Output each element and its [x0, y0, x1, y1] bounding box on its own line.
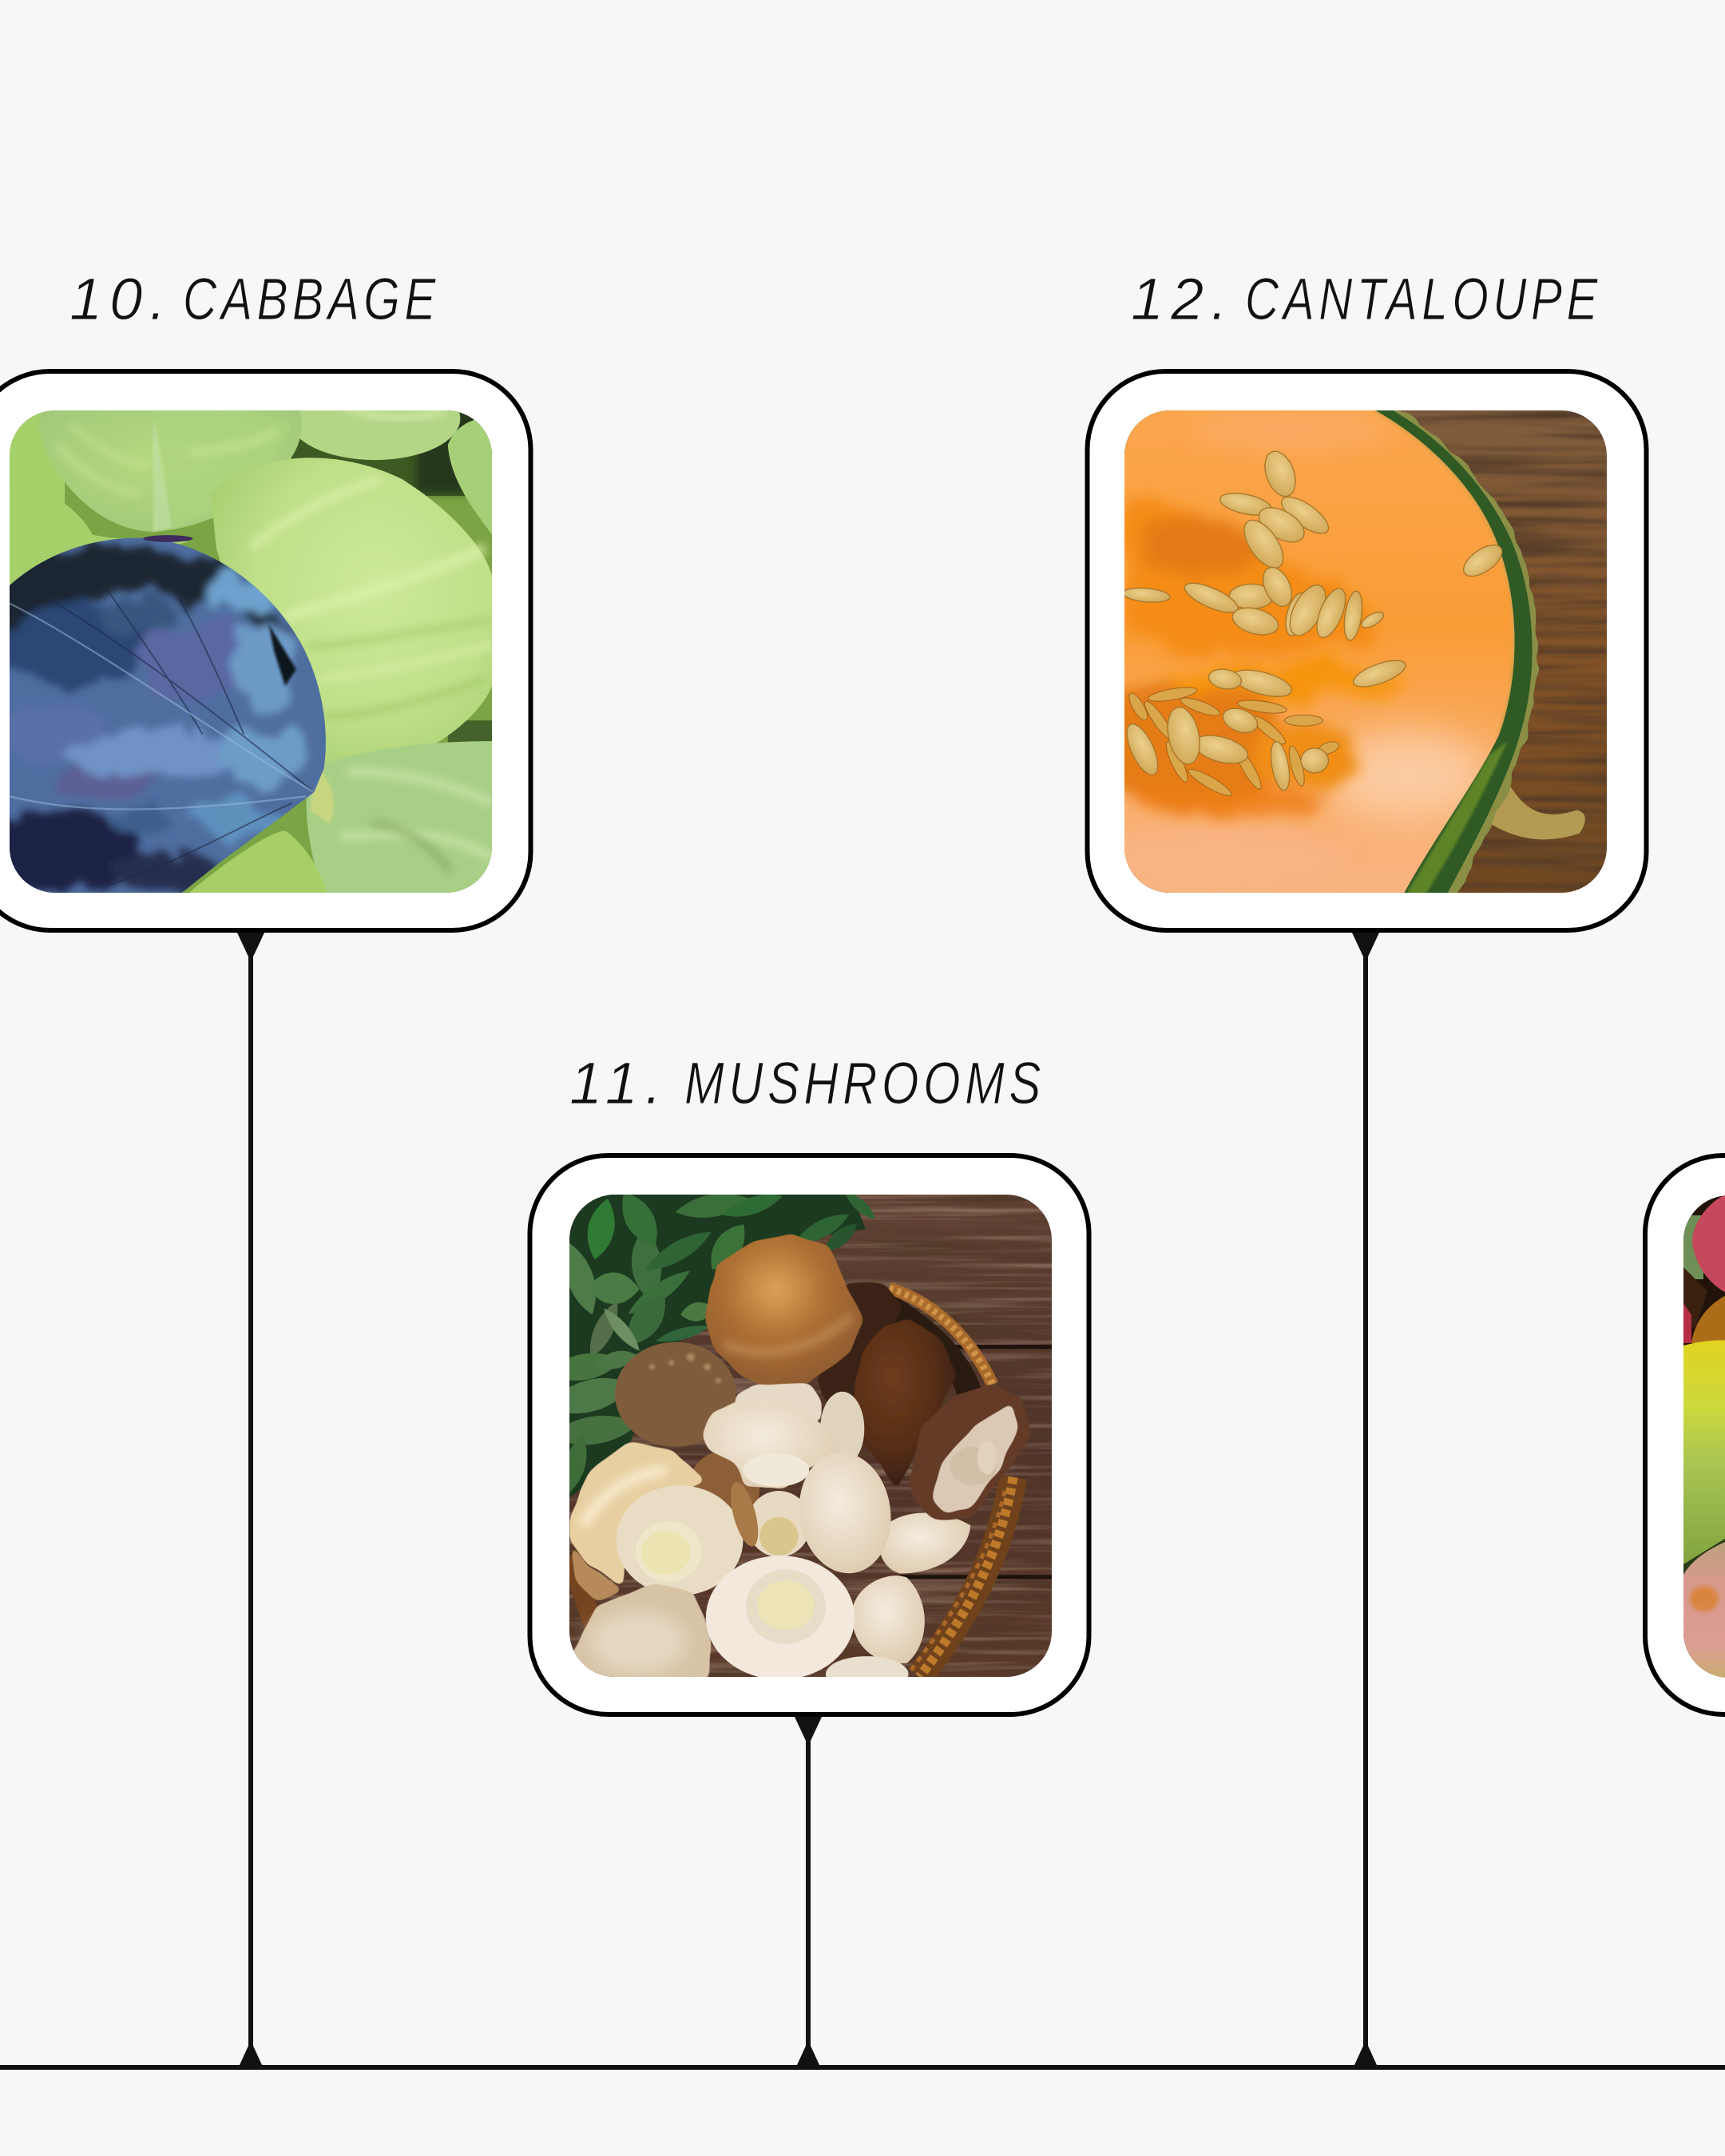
right white behind [820, 1392, 864, 1466]
card: cantaloupe [1077, 371, 1647, 930]
label: 10. Cabbage: CABBAGE [183, 266, 440, 332]
peach highlights [1324, 731, 1489, 820]
top right cabbage [299, 410, 460, 460]
small white center [748, 1491, 811, 1557]
card: mango (cropped at page edge) [1645, 1155, 1725, 1714]
bottom middle cabbage [188, 830, 327, 893]
bottom right cabbage [306, 741, 492, 893]
red cabbage [10, 538, 326, 893]
label: 12. Cantaloupe: CANTALOUPE [1245, 266, 1602, 332]
label: 10. Cabbage: 10. [69, 266, 173, 332]
connector: cabbage [237, 933, 264, 2065]
right white lower [878, 1513, 970, 1574]
left brown cap [615, 1342, 736, 1447]
lower right white [852, 1575, 925, 1663]
left oyster [569, 1443, 706, 1587]
label: 11. Mushrooms: 11. [569, 1050, 668, 1116]
left back cabbage [10, 410, 65, 504]
left round gill [617, 1485, 743, 1595]
seeds [1123, 447, 1507, 702]
photo: cantaloupe [1124, 410, 1607, 893]
card: mushrooms [530, 1155, 1089, 1714]
white round [791, 1447, 898, 1579]
dark brown cap [849, 1318, 957, 1491]
bottom tiny cap [826, 1656, 909, 1692]
timeline axis [0, 2065, 1725, 2070]
rind [1124, 403, 1537, 900]
big brown cap [704, 1235, 863, 1392]
cavity stains [1077, 504, 1407, 817]
photo: mango [1683, 1195, 1725, 1678]
back white cap [736, 1383, 822, 1422]
label: 11. Mushrooms: MUSHROOMS [684, 1050, 1045, 1116]
wicker basket [569, 1288, 1013, 1677]
right corner cabbage [448, 418, 492, 534]
label: 12. Cantaloupe [1131, 266, 1602, 332]
connector: cantaloupe [1352, 933, 1379, 2065]
right up cap [909, 1383, 1031, 1520]
label: 11. Mushrooms [569, 1050, 1045, 1116]
bottom oyster [569, 1584, 712, 1679]
flesh [1077, 410, 1607, 893]
top cabbage [39, 403, 302, 532]
label: 10. Cabbage [69, 266, 440, 332]
card: cabbage [0, 371, 530, 930]
big right cabbage [211, 458, 492, 771]
photo: mushrooms [569, 1195, 1052, 1677]
bottom white cap [706, 1556, 855, 1679]
stem [1485, 766, 1585, 839]
brown gill behind [688, 1451, 759, 1528]
top white cap [702, 1398, 837, 1491]
photo: cabbage [10, 410, 492, 893]
dark brown back cap [818, 1282, 903, 1408]
label: 12. Cantaloupe: 12. [1131, 266, 1235, 332]
leaves [569, 1195, 866, 1498]
connector: mushrooms [795, 1717, 822, 2065]
